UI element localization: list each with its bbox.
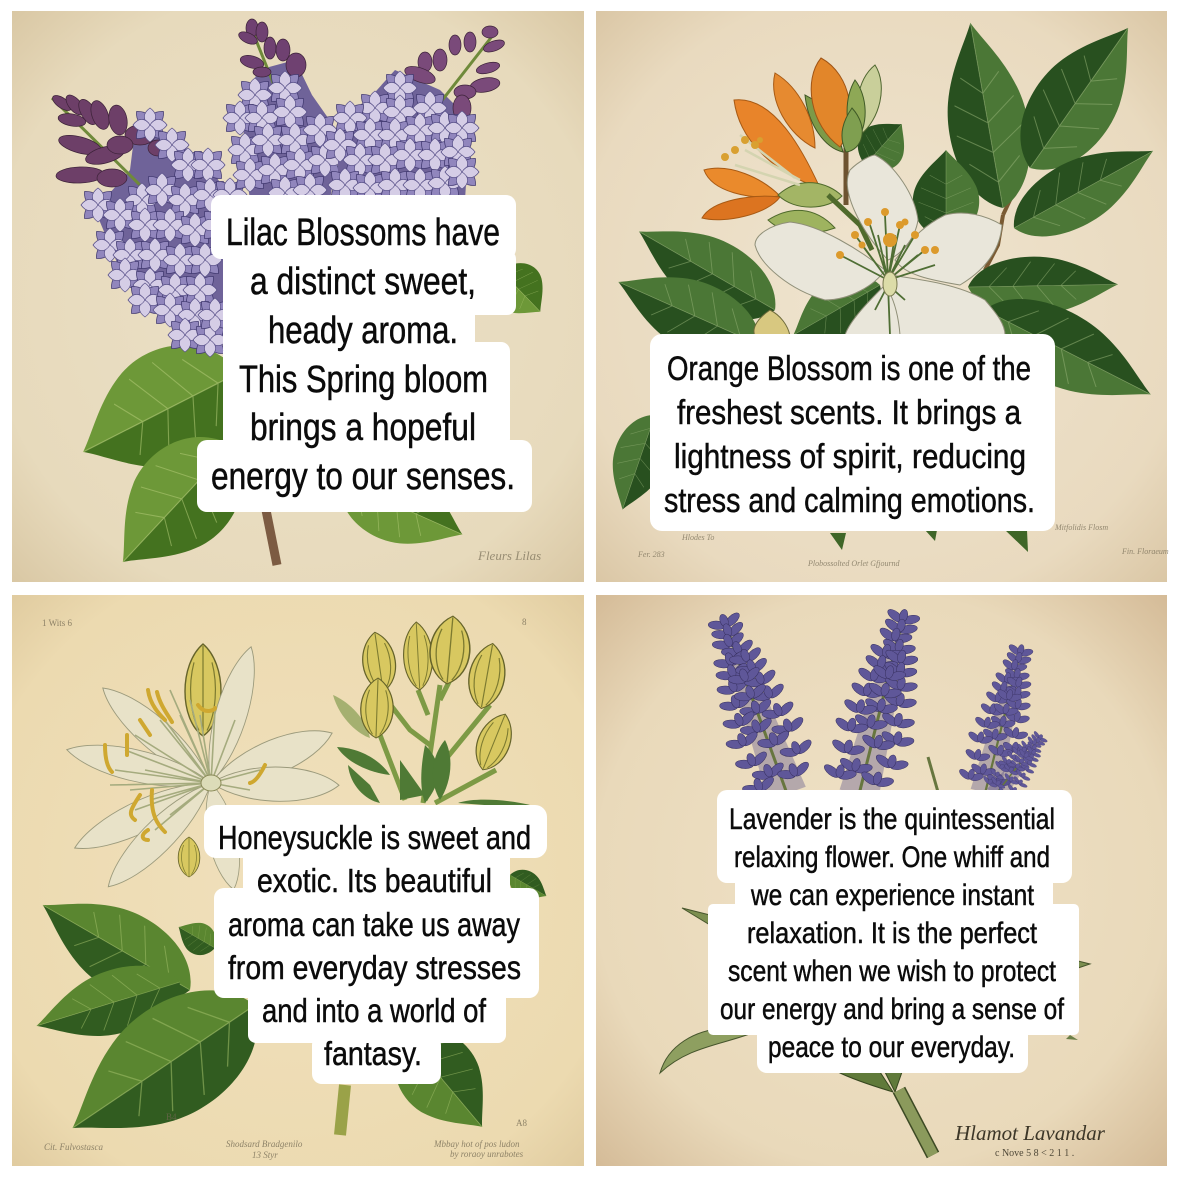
- panel background: [596, 11, 1167, 582]
- honeysuckle buds and stems: [333, 614, 530, 807]
- right lilac cluster: [313, 26, 506, 215]
- signature: Hlamot Lavandar: [954, 1121, 1106, 1145]
- caption: orange blossom: lightness of spirit, reducing: [674, 438, 1026, 476]
- caption: honeysuckle: aroma can take us away: [228, 907, 520, 944]
- caption: honeysuckle: from everyday stresses: [228, 950, 521, 987]
- caption: orange blossom: freshest scents. It brings a: [677, 394, 1021, 432]
- panel background: [12, 595, 584, 1166]
- caption: lavender: relaxation. It is the perfect: [747, 917, 1037, 950]
- caption: lilac: a distinct sweet,: [250, 261, 476, 303]
- caption: lavender: [708, 790, 1079, 1073]
- caption: orange blossom: [650, 334, 1055, 531]
- plate notes: 1 Wits 6: [42, 618, 72, 628]
- panel: lavender: [596, 595, 1167, 1166]
- white blossom: [755, 155, 1005, 335]
- panel background: [12, 11, 584, 582]
- left lilac cluster: [50, 92, 257, 367]
- caption: lilac: Lilac Blossoms have: [226, 212, 500, 254]
- lavender spikes: [682, 599, 1059, 808]
- caption: honeysuckle: exotic. Its beautiful: [257, 863, 492, 900]
- caption: honeysuckle: fantasy.: [324, 1036, 422, 1073]
- panel background: [596, 595, 1167, 1166]
- signature: [954, 1121, 1106, 1159]
- caption: honeysuckle: and into a world of: [262, 993, 487, 1030]
- plate notes: Cit. Fulvostasca: [44, 1142, 103, 1152]
- caption: lilac: heady aroma.: [268, 310, 458, 352]
- plate notes: 8: [522, 617, 527, 627]
- caption: lilac: brings a hopeful: [250, 407, 476, 449]
- caption: honeysuckle: Honeysuckle is sweet and: [218, 820, 531, 857]
- caption: orange blossom: Orange Blossom is one of the: [667, 350, 1031, 388]
- caption: lilac: This Spring bloom: [239, 359, 488, 401]
- plate notes: B4: [166, 1112, 177, 1122]
- orange blossom leaves: [597, 4, 1169, 552]
- caption: lavender: our energy and bring a sense of: [720, 993, 1065, 1026]
- lilac stem: [265, 505, 277, 565]
- plate notes: Hlodes To: [681, 533, 714, 542]
- caption: lavender: Lavender is the quintessential: [729, 803, 1055, 836]
- plate notes: by roraoy unrabotes: [450, 1149, 524, 1159]
- lavender leaves and stem: [660, 908, 1090, 1155]
- plate notes: Mbbay hot of pos ludon: [433, 1139, 520, 1149]
- plate notes: Fin. Floraeum: [1121, 547, 1169, 556]
- caption: lilac: [197, 195, 532, 512]
- caption: lavender: we can experience instant: [750, 879, 1034, 912]
- panel: lilac: [12, 11, 584, 596]
- plate notes: [637, 523, 1169, 568]
- plate notes: 13 Styr: [252, 1150, 278, 1160]
- orange flower petals: [702, 73, 872, 250]
- signature: Fleurs Lilas: [477, 548, 541, 563]
- caption: lavender: scent when we wish to protect: [728, 955, 1056, 988]
- caption: lavender: relaxing flower. One whiff and: [734, 841, 1050, 874]
- caption: honeysuckle: [204, 805, 547, 1084]
- honeysuckle lower leaves and stem: [23, 863, 553, 1174]
- plate notes: Mitfolidis Flosm: [1054, 523, 1108, 532]
- plate notes: [42, 617, 527, 1160]
- plate notes: A8: [516, 1118, 527, 1128]
- panel: honeysuckle: [12, 595, 584, 1174]
- plate notes: Fer. 283: [637, 550, 665, 559]
- lily flower: [63, 642, 339, 898]
- plate notes: Plobossolted Orlet Gfjournd: [807, 559, 901, 568]
- plate notes: Shodsard Bradgenilo: [226, 1139, 303, 1149]
- caption: orange blossom: stress and calming emotions.: [664, 482, 1035, 520]
- signature: c Nove 5 8 < 2 1 1 .: [995, 1148, 1074, 1159]
- caption: lilac: energy to our senses.: [211, 456, 515, 498]
- orange bud and green buds: [805, 58, 881, 205]
- cream bud: [754, 310, 790, 336]
- lilac leaves: [57, 252, 559, 596]
- caption: lavender: peace to our everyday.: [768, 1031, 1015, 1064]
- panel: orange blossom: [596, 4, 1169, 582]
- middle lilac cluster: [213, 19, 352, 220]
